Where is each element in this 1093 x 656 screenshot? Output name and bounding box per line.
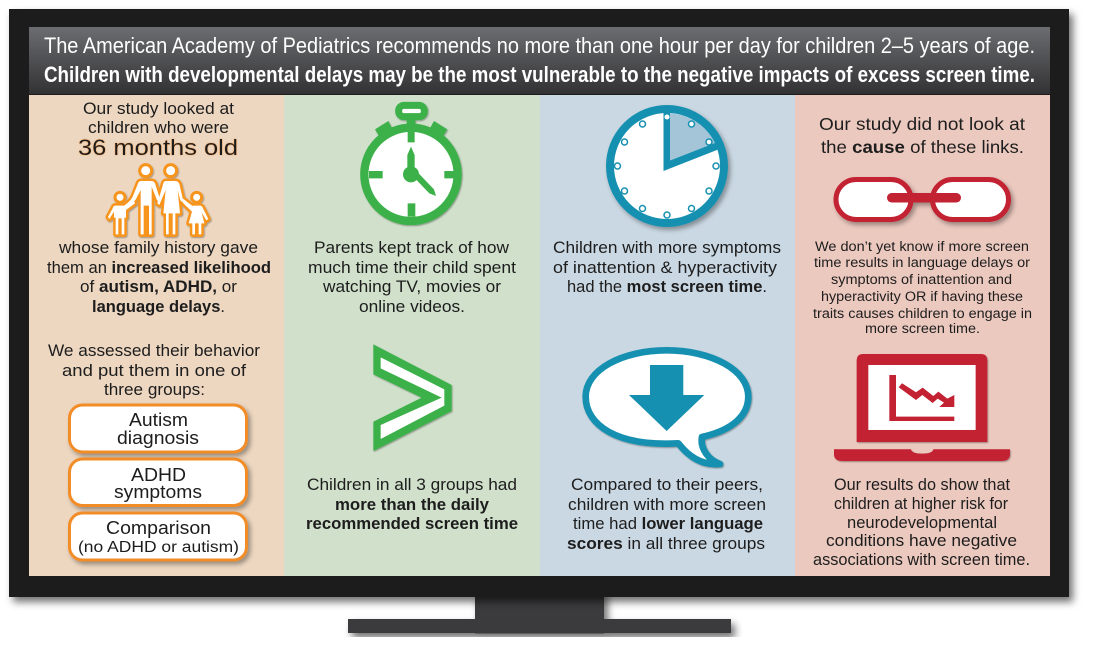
text: causation unknown: time results in language delays or — [814, 255, 1031, 270]
panel: findings background — [540, 95, 795, 576]
text: causation unknown — [813, 239, 1032, 336]
text: causation unknown: symptoms of inattention and — [831, 272, 1012, 287]
icon: clock — [610, 109, 724, 223]
text: results: neurodevelopmental — [847, 514, 997, 532]
text: 36 months old: 36 months old — [78, 135, 238, 160]
text: results — [813, 476, 1030, 569]
group box: comparison: Comparison — [106, 518, 211, 538]
panel: tracking background — [284, 95, 540, 576]
text: lower language scores — [567, 476, 766, 553]
text: assessment: We assessed their behavior — [48, 342, 261, 360]
text: cause not studied: the cause of these links. — [821, 137, 1024, 157]
icon: family — [108, 165, 208, 234]
text: causation unknown: traits causes children to engage in — [813, 306, 1032, 321]
text: assessment — [48, 342, 261, 399]
group box: autism: Autism — [129, 410, 188, 430]
panel: limitations background — [795, 95, 1050, 576]
icon: greater-than sign — [373, 344, 452, 451]
group box: adhd: ADHD — [131, 465, 186, 485]
text: lower language scores: Compared to their peers, — [571, 476, 763, 494]
text: family history — [47, 239, 271, 316]
icon: stopwatch — [364, 105, 458, 221]
header banner — [29, 27, 1050, 94]
text: parents tracked — [308, 239, 516, 316]
group box: autism: diagnosis — [117, 428, 199, 448]
text: family history: of autism, ADHD, or — [80, 278, 238, 296]
icon: broken chain links — [836, 180, 1008, 220]
text: more than recommended: more than the daily — [335, 496, 490, 514]
text: family history: whose family history gave — [58, 239, 258, 257]
tv stand — [348, 590, 731, 634]
text: parents tracked: Parents kept track of how — [314, 239, 509, 257]
text: inattention and hyperactivity: Children with more symptoms — [553, 239, 781, 257]
group box: adhd: symptoms — [114, 482, 202, 502]
icon: speech bubble with down arrow — [586, 350, 748, 464]
text: causation unknown: more screen time. — [865, 321, 980, 336]
text: cause not studied — [819, 114, 1025, 157]
panel: study population background — [29, 95, 284, 576]
text: more than recommended: Children in all 3 groups had — [307, 476, 517, 494]
text: inattention and hyperactivity — [553, 239, 781, 296]
text: parents tracked: much time their child spent — [308, 259, 516, 277]
text: family history: them an increased likelihood — [47, 259, 271, 277]
text: lower language scores: scores in all three groups — [567, 535, 765, 553]
group box: comparison: (no ADHD or autism) — [78, 539, 239, 556]
text: inattention and hyperactivity: of inattention & hyperactivity — [553, 259, 778, 277]
text: results: Our results do show that — [834, 476, 1010, 494]
text: inattention and hyperactivity: had the most screen time. — [567, 278, 767, 296]
text: lower language scores: children with more screen — [568, 496, 766, 514]
text: more than recommended: recommended screen time — [306, 515, 518, 533]
text: assessment: and put them in one of — [62, 362, 246, 380]
text: parents tracked: online videos. — [359, 298, 465, 316]
text: study intro: children who were — [88, 119, 229, 137]
text: results: conditions have negative — [826, 532, 1017, 550]
text: family history: language delays. — [92, 298, 225, 316]
group box: comparison — [70, 513, 246, 560]
text: parents tracked: watching TV, movies or — [322, 278, 502, 296]
text: study intro — [83, 100, 234, 137]
text: causation unknown: We don’t yet know if more screen — [815, 239, 1029, 254]
group box: autism — [70, 405, 246, 452]
text: lower language scores: time had lower language — [573, 515, 763, 533]
text: more than recommended — [306, 476, 518, 533]
text: cause not studied: Our study did not look at — [819, 114, 1025, 134]
text: assessment: three groups: — [104, 381, 205, 399]
icon: laptop with declining chart — [834, 354, 1010, 461]
group box: adhd — [70, 459, 246, 506]
text: causation unknown: hyperactivity OR if having these — [821, 289, 1023, 304]
text: results: children at higher risk for — [834, 495, 1008, 513]
text: study intro: Our study looked at — [83, 100, 234, 118]
text: results: associations with screen time. — [813, 551, 1030, 569]
